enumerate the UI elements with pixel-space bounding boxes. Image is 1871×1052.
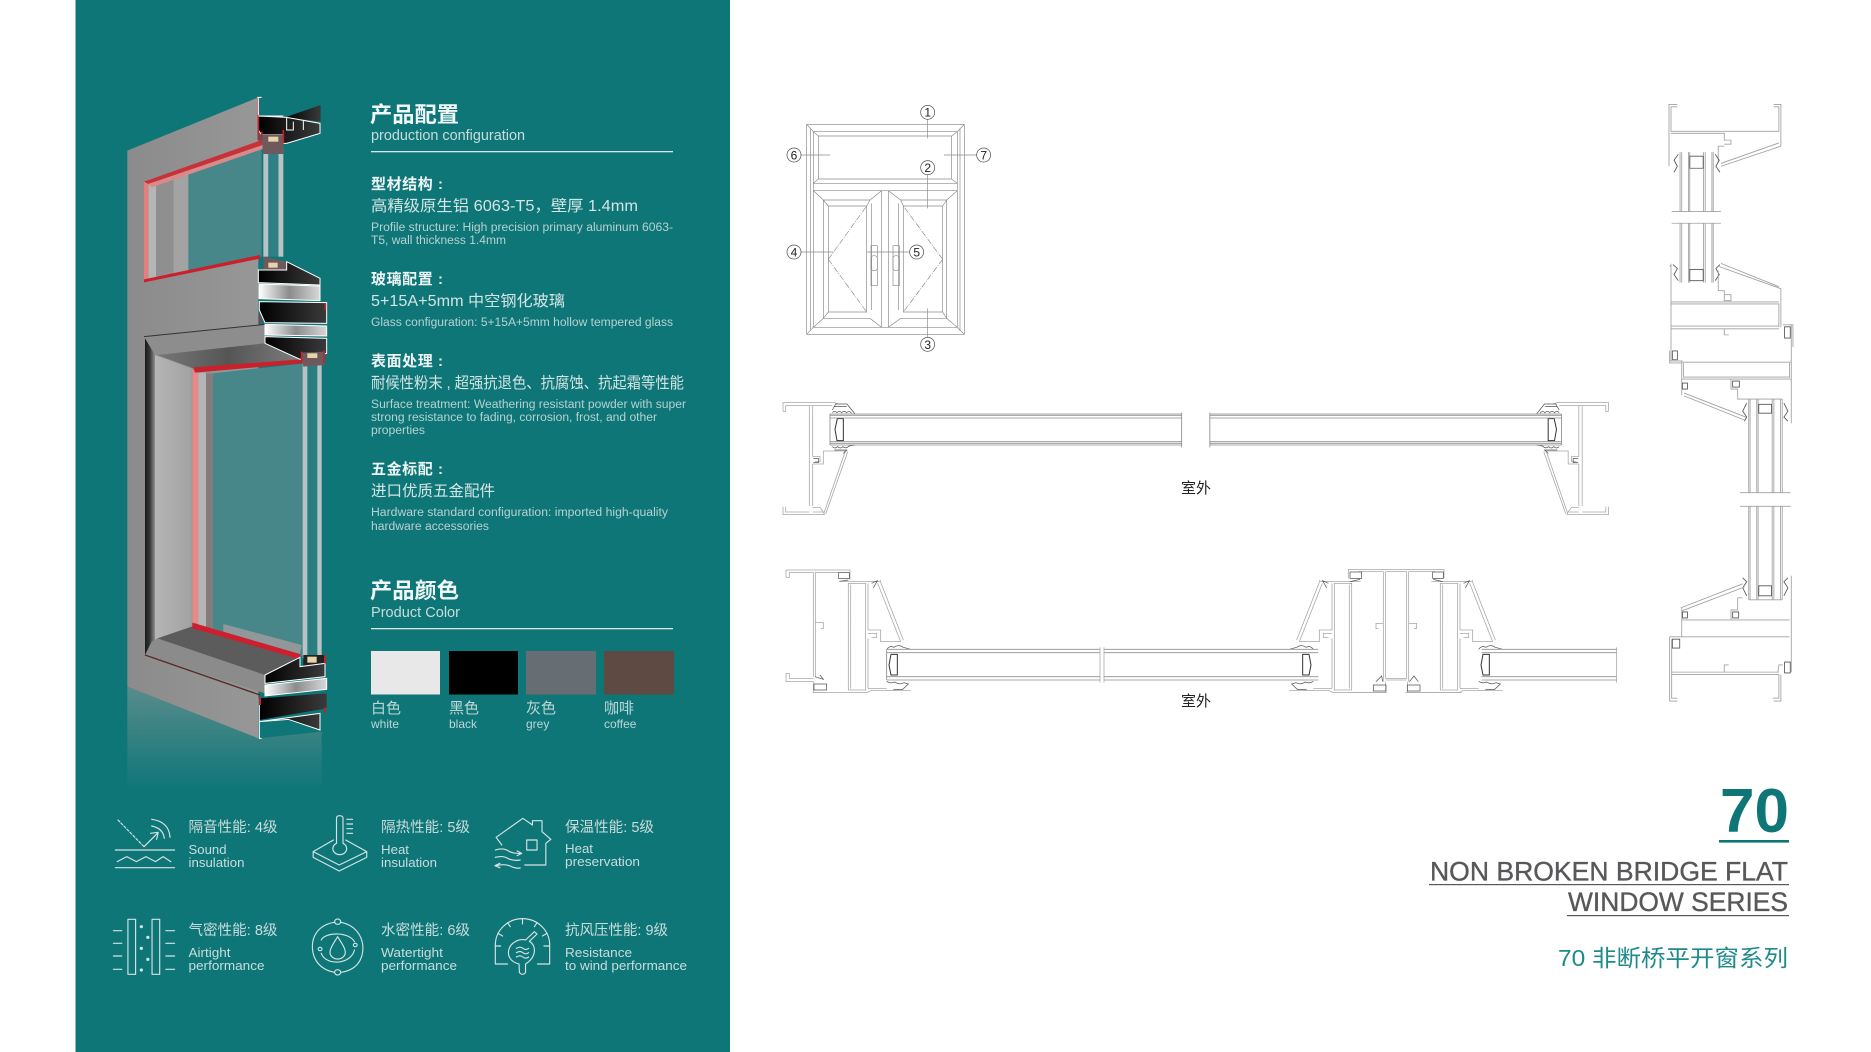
text block: hardware: 进口优质五金配件 [371, 482, 495, 500]
callout numbers: 2 [924, 161, 931, 175]
label: heat preservation: 保温性能: 5级 [565, 819, 654, 836]
chinese title: 70 非断桥平开窗系列 [1558, 945, 1788, 971]
label: wind resistance: to wind performance [565, 958, 687, 973]
label: heat preservation [565, 819, 654, 869]
label: wind resistance: Resistance [565, 945, 632, 960]
text block: surface treatment: Surface treatment: Weathering resistant powder with super [371, 399, 686, 411]
text block: surface treatment: 表面处理 : [371, 352, 443, 370]
label: watertight: 水密性能: 6级 [381, 922, 470, 939]
outer frame [786, 570, 850, 693]
window elevation drawing [787, 105, 991, 351]
swatch: black: 黑色 [449, 700, 479, 717]
heading: product color: 产品颜色 [370, 579, 459, 603]
text block: surface treatment: properties [371, 425, 425, 437]
swatch: white: white [370, 717, 399, 731]
swatch: coffee: coffee [604, 717, 637, 731]
english title: NON BROKEN BRIDGE FLAT [1430, 856, 1788, 886]
icon: watertight [312, 919, 363, 975]
callout numbers: 3 [924, 338, 931, 352]
icon: wind resistance [495, 919, 550, 974]
label: watertight [381, 922, 470, 973]
sash right [1405, 581, 1503, 693]
english title [1429, 856, 1789, 917]
label: sound insulation: 隔音性能: 4级 [188, 819, 278, 836]
text block: hardware: Hardware standard configuration: imported high-quality [371, 507, 668, 519]
text block: glass configuration [371, 270, 673, 329]
section drawing: horizontal double sash [786, 569, 1617, 693]
text block: profile structure [371, 175, 673, 247]
heading: product color [370, 579, 460, 621]
icon: heat preservation [495, 818, 551, 868]
text block: surface treatment: strong resistance to fading, corrosion, frost, and other [371, 412, 657, 424]
swatch: coffee [604, 651, 674, 731]
bottom profile section [259, 655, 327, 738]
sash left [813, 581, 911, 693]
callout numbers [791, 106, 987, 352]
callout numbers: 1 [924, 106, 931, 120]
heading: product color: Product Color [371, 605, 460, 621]
top frame and sash [1669, 104, 1781, 166]
handle left [871, 246, 877, 286]
text block: profile structure: 高精级原生铝 6063-T5，壁厚 1.4mm [371, 197, 638, 215]
label: heat insulation: insulation [381, 855, 437, 870]
label: heat insulation: Heat [381, 842, 409, 857]
swatch: black: black [449, 717, 478, 731]
swatch: white: 白色 [371, 700, 401, 717]
top profile section [257, 97, 321, 154]
text block: glass configuration: Glass configuration: 5+15A+5mm hollow tempered glass [371, 317, 673, 329]
label: wind resistance: 抗风压性能: 9级 [565, 922, 668, 939]
middle profile section [258, 257, 327, 367]
panel: teal left panel [76, 0, 730, 1052]
swatch: white [370, 651, 440, 731]
callout numbers: 6 [791, 148, 798, 162]
label: heat preservation: preservation [565, 854, 640, 869]
text block: hardware: 五金标配 : [371, 460, 443, 478]
label: airtight: 气密性能: 8级 [188, 922, 278, 939]
swatch: grey: 灰色 [526, 700, 556, 717]
text block: glass configuration: 5+15A+5mm 中空钢化玻璃 [371, 292, 565, 310]
text block: profile structure: 型材结构 : [371, 175, 443, 193]
bottom frame and sash [1670, 576, 1791, 701]
icon: airtight [113, 919, 175, 974]
lower glass [1740, 399, 1791, 600]
title block [1429, 777, 1789, 971]
section drawing: horizontal fixed, right [1210, 403, 1609, 515]
label: outdoor 1: 室外 [1181, 480, 1211, 497]
text block: glass configuration: 玻璃配置 : [371, 270, 443, 288]
english title: WINDOW SERIES [1568, 887, 1788, 917]
label: outdoor 2: 室外 [1181, 693, 1211, 710]
3D window profile render [127, 97, 327, 790]
text block: profile structure: Profile structure: High precision primary aluminum 6063- [371, 222, 673, 234]
callout numbers: 7 [980, 148, 987, 162]
label: airtight: Airtight [188, 945, 231, 960]
section drawing: horizontal fixed, left [783, 403, 1182, 515]
text block: hardware [371, 460, 668, 533]
label: wind resistance [565, 922, 687, 973]
text block: hardware: hardware accessories [371, 521, 489, 533]
swatch: black [449, 651, 518, 731]
performance grid [113, 816, 687, 975]
callout numbers: 4 [791, 246, 798, 260]
label: watertight: Watertight [381, 945, 443, 960]
handle right [893, 246, 899, 286]
heading: product configuration: 产品配置 [370, 103, 459, 127]
label: airtight: performance [188, 958, 264, 973]
section: product configuration [370, 103, 686, 533]
glass panes [887, 647, 1617, 683]
sash middle [1289, 581, 1387, 693]
heading: product configuration [370, 103, 525, 144]
swatch: grey [526, 651, 596, 731]
transom [1670, 263, 1793, 423]
section drawing: vertical [1669, 104, 1793, 701]
label: heat insulation [381, 819, 470, 870]
central mullion [1348, 569, 1462, 693]
text block: profile structure: T5, wall thickness 1.4mm [371, 235, 506, 247]
label: watertight: performance [381, 958, 457, 973]
swatch: grey: grey [526, 717, 549, 731]
heading: product configuration: production configuration [371, 128, 525, 144]
label: heat insulation: 隔热性能: 5级 [381, 819, 470, 836]
swatch: coffee: 咖啡 [604, 700, 634, 717]
text block: surface treatment: 耐候性粉末 , 超强抗退色、抗腐蚀、抗起霜等性能 [371, 374, 684, 392]
label: sound insulation [188, 819, 278, 870]
label: airtight [188, 922, 278, 973]
icon: sound insulation [115, 819, 175, 868]
label: sound insulation: Sound [188, 842, 226, 857]
text block: surface treatment [371, 352, 686, 437]
icon: heat insulation [313, 816, 367, 871]
label: heat preservation: Heat [565, 841, 593, 856]
section: product colours [370, 579, 674, 731]
callout numbers: 5 [913, 246, 920, 260]
label: sound insulation: insulation [188, 855, 244, 870]
series number: 70 [1720, 777, 1789, 846]
